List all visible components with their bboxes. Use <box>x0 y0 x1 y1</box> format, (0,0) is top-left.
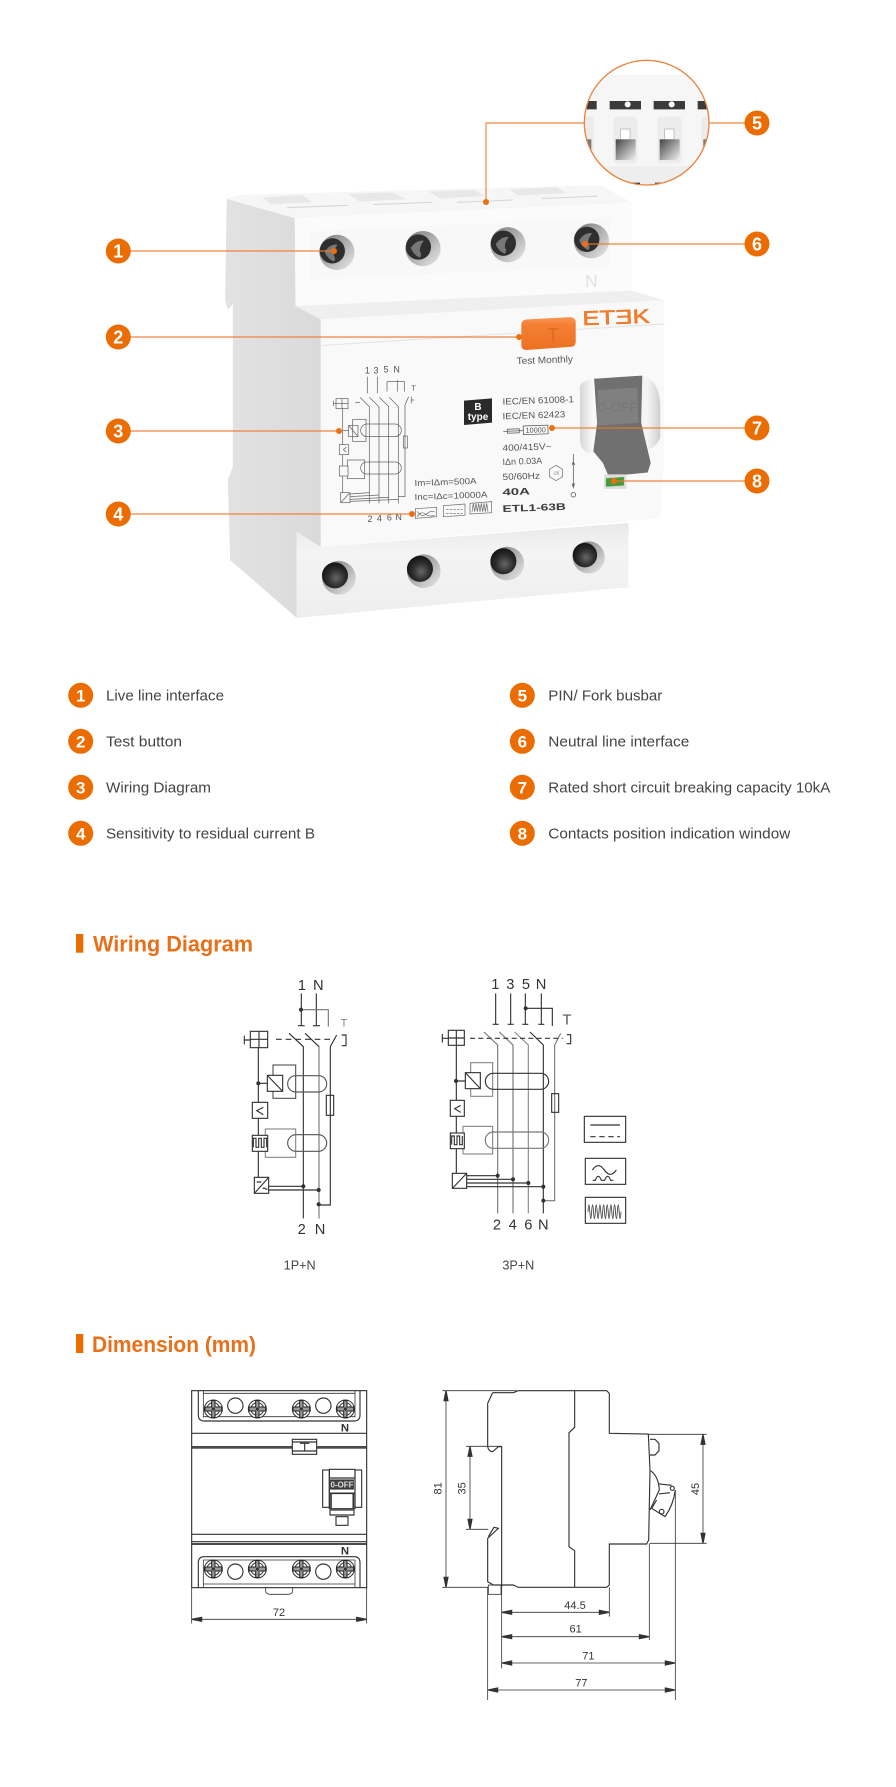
device middle front panel <box>321 300 664 547</box>
diagram 1P+N: N <box>315 1222 325 1238</box>
electrical ratings: 400/415V~ <box>502 441 552 453</box>
bottom terminal row <box>198 1545 360 1588</box>
product label printing <box>333 364 576 524</box>
callout badge 5 <box>744 110 770 136</box>
callout badge 1: 1 <box>113 242 123 262</box>
diagram 3P+N: 3 <box>506 977 514 993</box>
diagram 3P+N: T <box>563 1013 572 1029</box>
switch housing <box>580 376 660 453</box>
dimension drawing: front view <box>192 1391 367 1623</box>
legend item 4: 4 <box>76 824 86 844</box>
diagram 3P+N <box>442 977 572 1233</box>
upper terminal hole 3 <box>490 227 526 262</box>
handle outline <box>650 1471 675 1517</box>
residual current text: Inc=IΔc=10000A <box>414 489 488 502</box>
callout badge 8: 8 <box>752 472 762 492</box>
diagram 3P+N: 2 <box>493 1217 501 1233</box>
callout badge 4 <box>106 502 131 526</box>
legend item 6: Neutral line interface <box>548 735 689 751</box>
dimension drawing: side view <box>433 1391 707 1700</box>
legend item 7: 7 <box>518 778 527 798</box>
device lower block <box>297 523 629 618</box>
diagram 1P+N: T <box>341 1018 348 1030</box>
rating and model: 40A <box>502 486 530 498</box>
dimension 77: 77 <box>575 1677 587 1689</box>
dimension 35 <box>457 1446 502 1529</box>
legend item 5 <box>510 683 662 708</box>
callout badge 3: 3 <box>113 422 123 442</box>
callout badge 2 <box>106 324 131 350</box>
mini wiring diagram: 3 <box>373 365 378 375</box>
callout badge 5: 5 <box>752 114 762 134</box>
switch outline <box>323 1469 362 1525</box>
switch lever <box>593 376 651 476</box>
dimension 44.5 <box>502 1587 609 1668</box>
contact window <box>604 474 626 489</box>
mini wiring diagram: 5 <box>383 365 388 375</box>
callout badge 1 <box>106 238 131 264</box>
device top surface <box>227 185 632 218</box>
electrical ratings: IΔn 0.03A <box>502 456 542 467</box>
upper terminal hole 2 <box>405 231 441 266</box>
callout anchor dots <box>331 199 617 517</box>
waveform icons on label <box>415 502 492 518</box>
diagram 3P+N: 6 <box>524 1217 532 1233</box>
legend item 4: Sensitivity to residual current B <box>106 827 315 843</box>
diagram 1P+N: 2 <box>298 1222 306 1238</box>
switch lever: 0-OFF <box>598 400 638 415</box>
callout badge 6: 6 <box>752 234 762 254</box>
legend item 2 <box>68 729 182 754</box>
mini diagram lower labels: 2 <box>367 514 372 524</box>
callout badge 8 <box>744 468 770 494</box>
legend item 5: PIN/ Fork busbar <box>548 689 662 705</box>
upper terminal hole 4 <box>574 223 609 259</box>
breaking capacity symbol <box>503 425 548 436</box>
electrical ratings: 50/60Hz <box>502 471 541 482</box>
caption 3P+N: 3P+N <box>502 1258 534 1272</box>
diagram 3P+N: 4 <box>509 1217 517 1233</box>
callout badge 3 <box>106 418 131 444</box>
mini diagram lower labels: 6 <box>387 513 392 523</box>
legend item 3 <box>68 775 211 800</box>
standards text: IEC/EN 61008-1 <box>502 394 574 407</box>
callout leader lines <box>130 123 745 514</box>
diagram 3P+N: 5 <box>522 977 530 993</box>
width dimension 72: 72 <box>273 1607 285 1619</box>
lower terminal hole 4 <box>573 541 605 573</box>
diagram 3P+N: 1 <box>491 977 499 993</box>
wiring diagrams <box>244 977 626 1272</box>
mini wiring diagram: N <box>393 364 400 374</box>
test monthly text: Test Monthly <box>516 354 573 367</box>
callout badge 2: 2 <box>113 328 123 348</box>
standards text <box>502 394 574 421</box>
brand logo ETEK: ETƎK <box>582 306 651 330</box>
dimension 45: 45 <box>690 1483 702 1495</box>
legend item 6 <box>510 729 689 754</box>
legend item 2: 2 <box>76 732 85 752</box>
dimension 71: 71 <box>582 1650 594 1662</box>
legend item 1 <box>68 683 224 708</box>
legend item 6: 6 <box>518 732 527 752</box>
temperature icon <box>549 465 563 481</box>
rating and model: ETL1-63B <box>502 502 566 515</box>
dimension 81 <box>433 1391 517 1587</box>
upper terminal hole 1 <box>319 235 355 270</box>
device left side <box>225 199 321 618</box>
width dimension 72 <box>192 1588 367 1623</box>
diagram 3P+N: N <box>538 1217 549 1233</box>
electrical ratings <box>502 441 552 482</box>
dimension 61: 61 <box>570 1624 582 1636</box>
dimension 81: 81 <box>433 1482 445 1494</box>
bottom terminal row: N <box>341 1545 349 1557</box>
residual current text: Im=IΔm=500A <box>414 476 477 488</box>
diagram 1P+N <box>244 978 348 1238</box>
residual current text <box>414 476 488 502</box>
legend item 2: Test button <box>106 735 182 751</box>
legend item 4 <box>68 821 315 846</box>
top terminal row <box>198 1391 360 1435</box>
test button outline <box>292 1439 317 1454</box>
device middle strip <box>296 291 664 319</box>
lower terminal hole 3 <box>490 547 524 580</box>
rating and model <box>502 486 566 515</box>
standards text: IEC/EN 62423 <box>502 409 565 421</box>
legend item 7 <box>510 775 831 800</box>
caption 1P+N: 1P+N <box>284 1258 316 1272</box>
mini wiring diagram <box>333 364 416 503</box>
legend item 8: Contacts position indication window <box>548 827 791 843</box>
test button: T <box>547 326 559 347</box>
icon: DC waveform <box>584 1116 626 1142</box>
diagram 1P+N: 1 <box>298 978 306 994</box>
lower terminal hole 2 <box>407 554 441 588</box>
temperature icon: -25 <box>553 470 560 475</box>
lower terminal hole 1 <box>322 561 356 595</box>
on off arrow <box>571 454 576 497</box>
icon: AC pulsating waveform <box>585 1158 626 1184</box>
mini diagram lower labels: 4 <box>377 513 382 523</box>
callout badge 7 <box>744 416 770 440</box>
dimension 71 <box>502 1490 675 1700</box>
top terminal row: N <box>341 1423 349 1435</box>
mini wiring diagram: 1 <box>365 365 370 375</box>
legend item 1: 1 <box>76 686 85 706</box>
breaking capacity symbol: 10000 <box>525 425 546 435</box>
B type badge: B <box>474 402 482 413</box>
body outline <box>488 1391 650 1587</box>
dimension 77 <box>488 1587 675 1700</box>
legend item 7: Rated short circuit breaking capacity 10kA <box>548 781 831 797</box>
neutral mark: N <box>585 271 598 291</box>
legend item 5: 5 <box>518 686 527 706</box>
callout badge 6 <box>744 232 770 256</box>
legend item 3: Wiring Diagram <box>106 781 211 797</box>
dimension 35: 35 <box>457 1482 469 1494</box>
diagram 3P+N: N <box>536 977 546 993</box>
callout magnifier: busbar detail <box>580 60 715 186</box>
mini diagram lower labels <box>367 512 402 524</box>
diagram 1P+N: N <box>313 978 324 994</box>
dimension 44.5: 44.5 <box>564 1600 586 1612</box>
dimension 45 <box>648 1434 707 1543</box>
dimension 61 <box>502 1543 649 1640</box>
legend <box>68 683 831 846</box>
callout badge 7: 7 <box>752 418 762 438</box>
product photo: RCCB breaker <box>225 185 664 618</box>
legend item 8: 8 <box>518 824 527 844</box>
mini diagram lower labels: N <box>395 512 402 522</box>
device upper front block <box>295 203 632 306</box>
callout badge 4: 4 <box>113 504 123 524</box>
legend item 3: 3 <box>76 778 85 798</box>
switch outline: 0-OFF <box>330 1480 354 1489</box>
B type badge: type <box>468 412 489 423</box>
heading: Wiring Diagram: Wiring Diagram <box>93 932 253 956</box>
legend item 8 <box>510 821 791 846</box>
heading: Dimension: Dimension (mm) <box>92 1332 256 1357</box>
B type badge <box>464 398 492 425</box>
mini wiring diagram: T <box>411 384 416 393</box>
test button <box>521 317 576 350</box>
legend item 1: Live line interface <box>106 689 224 705</box>
icon: high frequency waveform <box>585 1197 626 1223</box>
